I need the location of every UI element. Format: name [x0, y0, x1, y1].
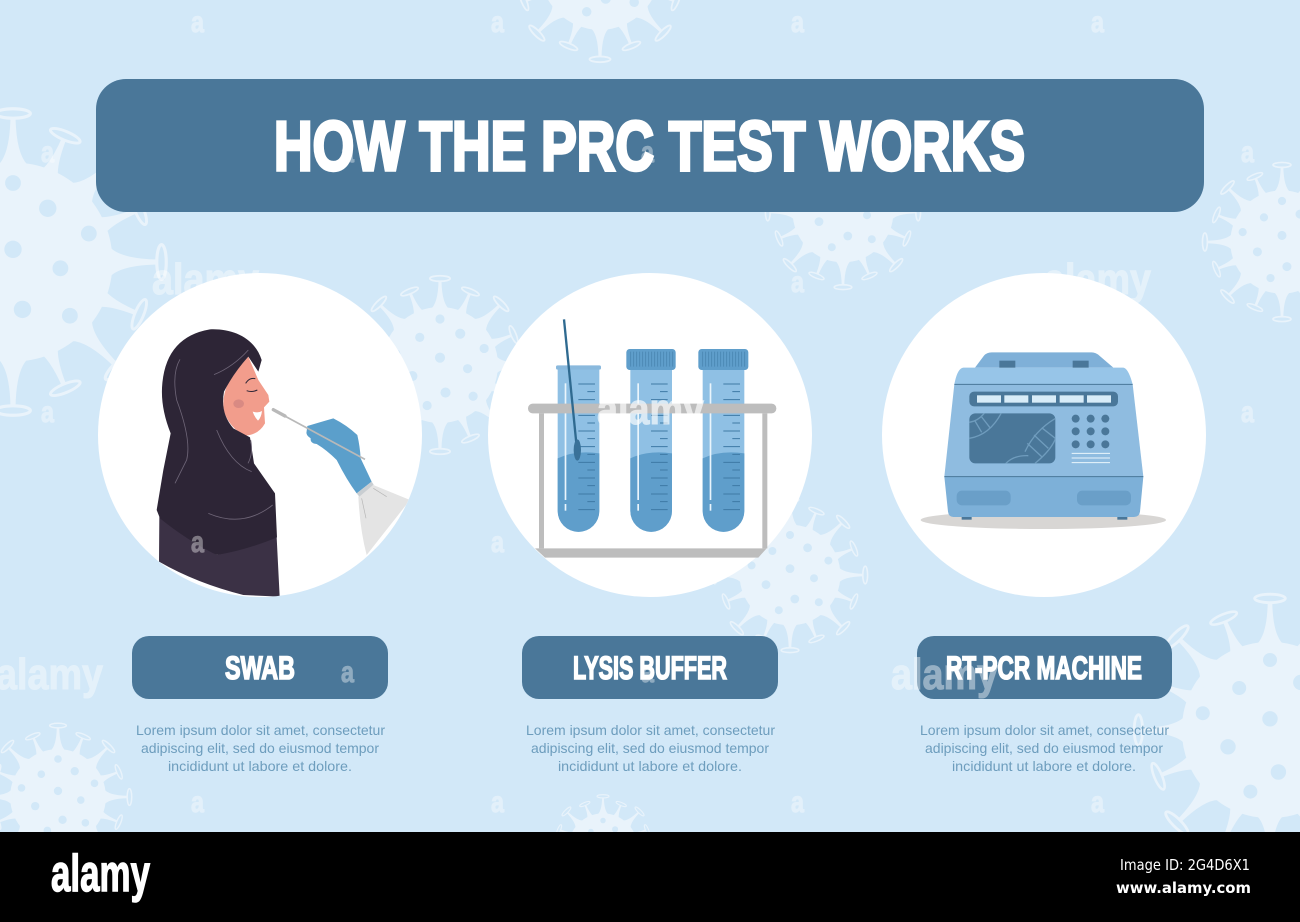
text: machine description: adipiscing elit, sed do eiusmod tempor: [925, 740, 1163, 756]
watermark overlay: a: [41, 396, 54, 429]
panel: swab circle: [98, 273, 422, 597]
watermark overlay: a: [191, 6, 204, 39]
watermark overlay: alamy: [1044, 255, 1151, 304]
illustration: test tubes in rack: [528, 319, 776, 558]
watermark overlay: a: [641, 656, 654, 689]
watermark overlay: a: [641, 136, 654, 169]
title: HOW THE PRC TEST WORKS: [274, 107, 1025, 185]
text: lysis buffer description: adipiscing elit, sed do eiusmod tempor: [531, 740, 769, 756]
text: swab description: adipiscing elit, sed do eiusmod tempor: [141, 740, 379, 756]
watermark overlay: a: [491, 786, 504, 819]
watermark overlay: a: [1241, 136, 1254, 169]
watermark overlay: alamy: [152, 255, 259, 304]
label: lysis buffer: LYSIS BUFFER: [573, 650, 727, 686]
watermark overlay: alamy: [891, 650, 998, 699]
tube two: [626, 349, 676, 532]
title banner: [96, 79, 1204, 212]
tube one with swab: [556, 365, 601, 532]
text: machine description: Lorem ipsum dolor sit amet, consectetur: [920, 722, 1169, 738]
text: swab description: incididunt ut labore et dolore.: [168, 758, 352, 774]
text: machine description: [920, 722, 1169, 774]
watermark overlay: a: [791, 6, 804, 39]
footer bar: [0, 832, 1300, 922]
watermark overlay: a: [1091, 6, 1104, 39]
panel: test tubes circle: [488, 273, 812, 597]
text: lysis buffer description: Lorem ipsum dolor sit amet, consectetur: [526, 722, 775, 738]
watermark overlay: a: [791, 266, 804, 299]
watermark overlay: a: [341, 656, 354, 689]
tube three: [698, 349, 748, 532]
watermark overlay: a: [1241, 396, 1254, 429]
watermark overlay: a: [191, 526, 204, 559]
footer logo: alamy: [51, 845, 150, 903]
watermark overlay: a: [191, 786, 204, 819]
label: swab: [132, 636, 388, 699]
watermark overlay: a: [1091, 786, 1104, 819]
illustration: patient and gloved hand with swab: [157, 329, 410, 597]
text: lysis buffer description: [526, 722, 775, 774]
watermark overlay: alamy: [597, 385, 704, 434]
label: swab: SWAB: [225, 650, 295, 686]
watermark overlay: a: [341, 396, 354, 429]
watermark overlay: a: [491, 526, 504, 559]
text: swab description: [136, 722, 385, 774]
text: lysis buffer description: incididunt ut labore et dolore.: [558, 758, 742, 774]
website: www.alamy.com: [1116, 879, 1251, 897]
panel: RT-PCR machine circle: [882, 273, 1206, 597]
illustration: PCR machine: [921, 352, 1166, 529]
watermark overlay: a: [341, 136, 354, 169]
text: machine description: incididunt ut labore et dolore.: [952, 758, 1136, 774]
text: swab description: Lorem ipsum dolor sit amet, consectetur: [136, 722, 385, 738]
watermark overlay: a: [791, 786, 804, 819]
label: RT-PCR machine: [917, 636, 1172, 699]
image id: Image ID: 2G4D6X1: [1120, 856, 1250, 874]
label: RT-PCR machine: RT-PCR MACHINE: [946, 650, 1142, 686]
label: lysis buffer: [522, 636, 778, 699]
watermark overlay: a: [41, 136, 54, 169]
watermark overlay: a: [491, 6, 504, 39]
